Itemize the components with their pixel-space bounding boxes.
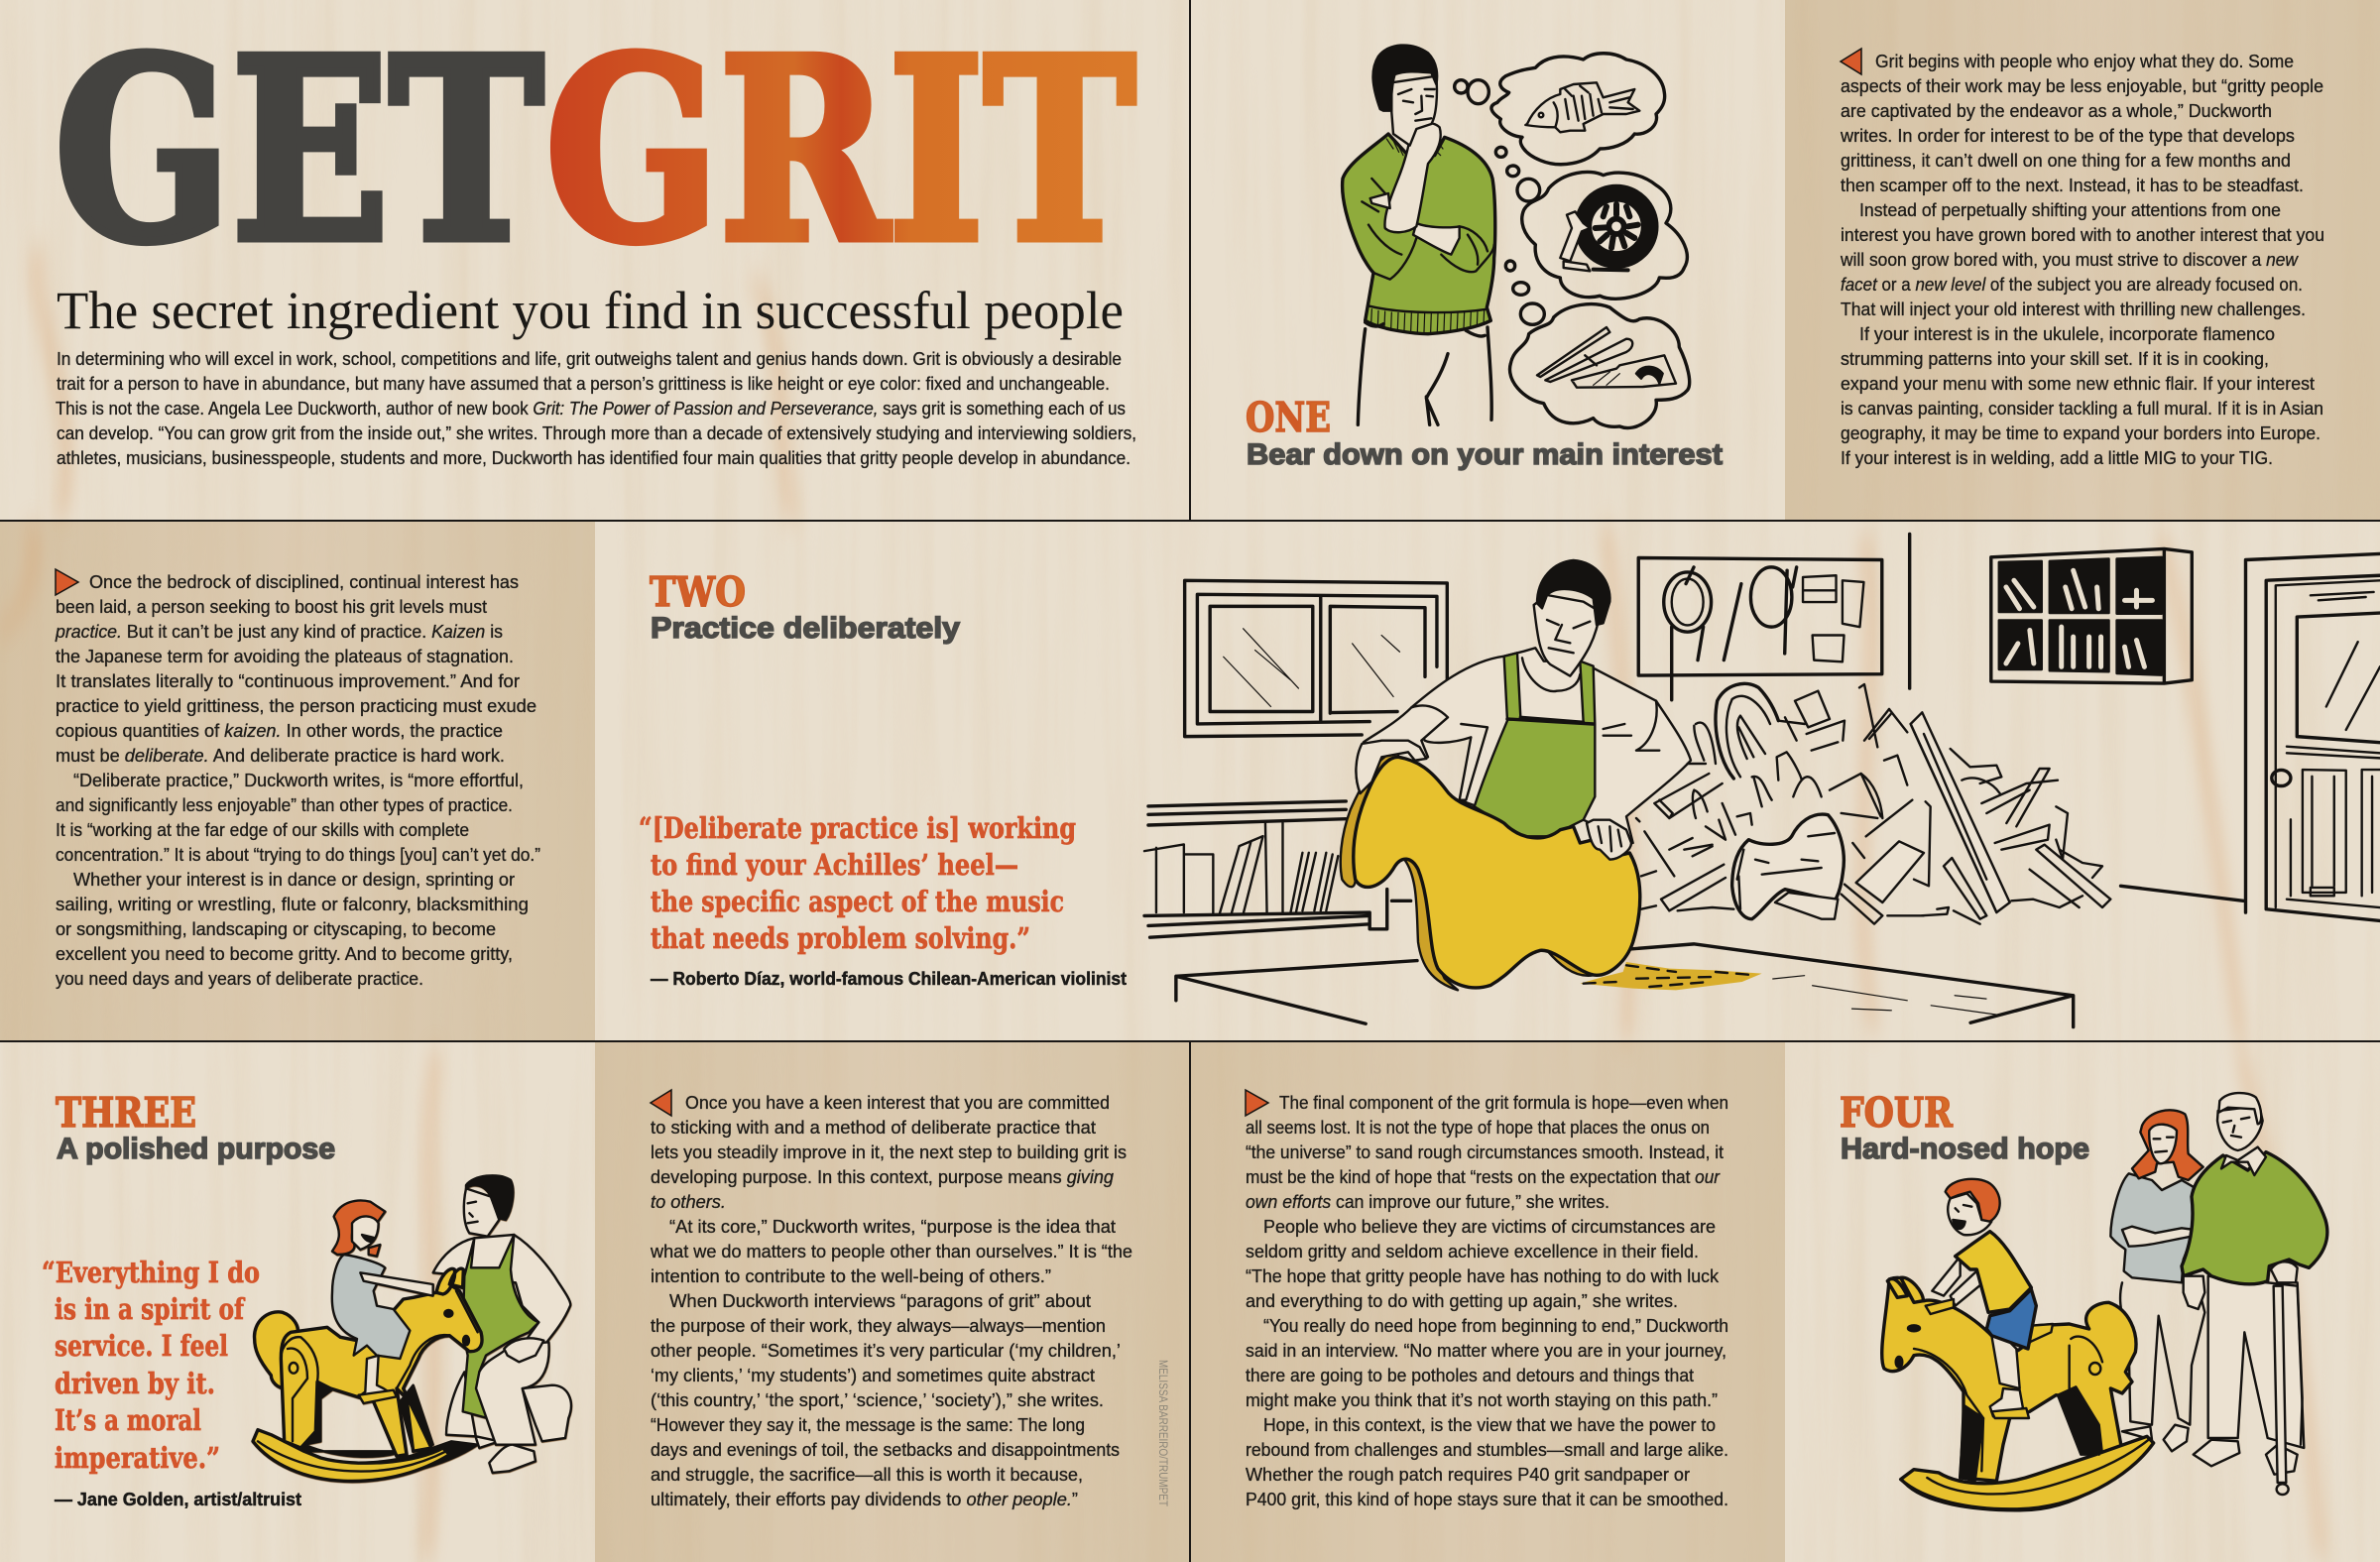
window	[1185, 580, 1447, 737]
heading: THREE	[56, 1089, 335, 1165]
text block: column two: been laid, a person seeking to boost his grit levels must	[56, 596, 487, 617]
text block: column three: developing purpose. In this context, purpose means giving	[651, 1166, 1115, 1187]
bookshelf	[1144, 801, 1411, 937]
pull quote: Roberto Diaz: the specific aspect of the music	[651, 885, 1064, 918]
pull quote: Jane Golden: It’s a moral	[55, 1403, 201, 1437]
text block: column two: you need days and years of deliberate practice.	[56, 968, 423, 989]
heading: ONE	[1246, 394, 1723, 471]
text block: column one: If your interest is in the ukulele, incorporate flamenco	[1859, 323, 2275, 344]
text block: column one: aspects of their work may be less enjoyable, but “gritty people	[1841, 75, 2323, 96]
text block: column three: to sticking with and a method of deliberate practice that	[651, 1117, 1096, 1138]
pull quote: Roberto Diaz: to find your Achilles’ heel—	[651, 848, 1018, 882]
pull quote: Jane Golden: imperative.”	[55, 1441, 220, 1475]
text block: column one: writes. In order for interest to be of the type that develops	[1840, 125, 2295, 146]
pull quote: Roberto Diaz: that needs problem solving.”	[651, 921, 1030, 955]
pull quote: Jane Golden: service. I feel	[55, 1329, 228, 1363]
icon: left marker triangle	[1841, 49, 1861, 74]
rocking horse	[291, 1379, 404, 1457]
text block: column one: will soon grow bored with, you must strive to discover a new	[1840, 249, 2300, 270]
wall cabinet	[1991, 548, 2192, 683]
text block: column three: “At its core,” Duckworth writes, “purpose is the idea that	[669, 1216, 1116, 1237]
door	[2121, 553, 2380, 920]
text block: column two: It translates literally to “continuous improvement.” And for	[56, 670, 520, 691]
text block: column four: Whether the rough patch requires P40 grit sandpaper or	[1246, 1464, 1690, 1485]
text block: column four: P400 grit, this kind of hope stays sure that it can be smoothed.	[1246, 1489, 1728, 1509]
boy	[1932, 1257, 1961, 1296]
heading: FOUR	[1840, 1089, 2089, 1165]
credit: photographer: MELISSA BARREIRO/TRUMPET	[1156, 1360, 1170, 1507]
text block: column two	[55, 569, 540, 989]
icon: left marker triangle	[651, 1090, 671, 1116]
text block: column one: is canvas painting, consider tackling a full mural. If it is in Asian	[1841, 398, 2323, 419]
text block: column two: “Deliberate practice,” Duckworth writes, is “more effortful,	[73, 770, 524, 790]
text block: column one: Grit begins with people who enjoy what they do. Some	[1875, 51, 2294, 71]
illustration: workshop background	[1144, 534, 2380, 1027]
icon: right marker triangle	[56, 569, 78, 595]
text block: column three: the purpose of their work, they always—always—mention	[651, 1315, 1106, 1336]
text block: column three: days and evenings of toil, the setbacks and disappointments	[651, 1439, 1120, 1460]
text block: column four: “the universe” to sand rough circumstances smooth. Instead, it	[1246, 1141, 1724, 1162]
text block: column two: concentration.” It is about “trying to do things [you] can’t yet do.”	[56, 844, 540, 865]
text block: column four: there are going to be potholes and detours and things that	[1246, 1365, 1694, 1385]
text block: column four: must be the kind of hope that “rests on the expectation that our	[1246, 1166, 1721, 1187]
pegboard with tools	[1638, 557, 1882, 700]
text block: column two: the Japanese term for avoiding the plateaus of stagnation.	[56, 646, 514, 666]
text block: column three: other people. “Sometimes it’s very particular (‘my children,’	[651, 1340, 1121, 1361]
illustration: boy on rocking horse with grandparents	[1882, 1093, 2327, 1510]
text block: introduction: athletes, musicians, businesspeople, students and more, Duckworth has identified four main qualities that gritty people develop in abundance.	[57, 447, 1130, 468]
title: GET GRIT: GRIT	[545, 4, 1135, 298]
pull quote: Roberto Diaz: — Roberto Díaz, world-famous Chilean-American violinist	[651, 969, 1127, 989]
text block: column three: (‘this country,’ ‘the sport,’ ‘science,’ ‘society’),” she writes.	[651, 1389, 1104, 1410]
text block: column three: Once you have a keen interest that you are committed	[685, 1092, 1110, 1113]
boards	[1911, 712, 2010, 912]
text block: column two: sailing, writing or wrestling, flute or falconry, blacksmithing	[56, 894, 529, 914]
text block: column three	[650, 1090, 1132, 1509]
text block: column four: might make you think that it’s not worth staying on this path.”	[1246, 1389, 1718, 1410]
text block: column three: ultimately, their efforts pay dividends to other people.”	[651, 1489, 1078, 1509]
icon: chisels and saw	[1537, 327, 1676, 388]
text block: column three: what we do matters to people other than ourselves.” It is “the	[650, 1241, 1132, 1262]
text block: column one: That will inject your old interest with thrilling new challenges.	[1841, 299, 2306, 319]
text block: column one: strumming patterns into your skill set. If it is in cooking,	[1841, 348, 2269, 369]
text block: column one: Instead of perpetually shifting your attentions from one	[1859, 199, 2281, 220]
text block: column one: then scamper off to the next. Instead, it has to be steadfast.	[1841, 175, 2304, 195]
text block: column one: facet or a new level of the subject you are already focused on.	[1841, 274, 2303, 295]
text block: column three: to others.	[651, 1191, 726, 1212]
heading: ONE: ONE	[1246, 394, 1331, 441]
text block: column four: all seems lost. It is not the type of hope that places the onus on	[1246, 1117, 1710, 1138]
text block: column four: The final component of the grit formula is hope—even when	[1279, 1092, 1728, 1113]
text block: column two: copious quantities of kaizen. In other words, the practice	[56, 720, 503, 741]
pull quote: Jane Golden: — Jane Golden, artist/altruist	[55, 1490, 301, 1509]
rocking horse	[1904, 1441, 2145, 1510]
text block: column two: practice to yield grittiness, the person practicing must exude	[56, 695, 536, 716]
text block: column three: When Duckworth interviews “paragons of grit” about	[669, 1290, 1091, 1311]
text block: column three: “However they say it, the message is the same: The long	[651, 1414, 1085, 1435]
text block: column three: lets you steadily improve in it, the next step to building grit is	[651, 1141, 1127, 1162]
heading: subtitle: The secret ingredient you find in successful people	[57, 281, 1124, 340]
pull quote: Jane Golden: “Everything I do	[42, 1256, 260, 1289]
workbench	[1176, 944, 2074, 1027]
text block: column two: and significantly less enjoyable” than other types of practice.	[56, 794, 513, 815]
text block: column four: Hope, in this context, is the view that we have the power to	[1263, 1414, 1716, 1435]
icon: fish	[1525, 82, 1639, 132]
text block: column two: must be deliberate. And deliberate practice is hard work.	[56, 745, 505, 766]
heading: FOUR: FOUR	[1840, 1089, 1954, 1137]
pull quote: Jane Golden: is in a spirit of	[55, 1292, 246, 1326]
text block: column one: interest you have grown bored with to another interest that you	[1841, 224, 2324, 245]
heading: THREE: THREE	[56, 1089, 196, 1137]
illustration: carver shaping wood	[1341, 560, 1762, 990]
icon: right marker triangle	[1246, 1090, 1268, 1116]
text block: column four: own efforts can improve our future,” she writes.	[1246, 1191, 1609, 1212]
text block: introduction: can develop. “You can grow grit from the inside out,” she writes. Through more than a decade of extensively studying and interviewing soldiers,	[57, 422, 1136, 443]
text block: introduction: In determining who will excel in work, school, competitions and life, grit outweighs talent and genius hands down. Grit is obviously a desirable	[57, 348, 1122, 369]
pull quote: Jane Golden: driven by it.	[55, 1367, 215, 1400]
title: GET GRIT	[55, 4, 1135, 298]
text block: column three: ‘my clients,’ ‘my students’) and sometimes quite abstract	[651, 1365, 1095, 1385]
text block: column two: It is “working at the far edge of our skills with complete	[56, 819, 469, 840]
heading: TWO: TWO	[650, 568, 746, 616]
text block: column four: People who believe they are victims of circumstances are	[1263, 1216, 1716, 1237]
text block: column two: or songsmithing, landscaping or cityscaping, to become	[56, 918, 496, 939]
illustration: man and girl with rocking horse	[253, 1175, 571, 1481]
girl	[332, 1200, 385, 1257]
text block: column two: excellent you need to become gritty. And to become gritty,	[56, 943, 513, 964]
text block: column four: and everything to do with getting up again,” she writes.	[1246, 1290, 1678, 1311]
text block: introduction	[56, 348, 1136, 468]
title: GET GRIT: GET	[55, 4, 543, 298]
pull quote: Roberto Diaz: “[Deliberate practice is] working	[639, 811, 1076, 845]
text block: column one	[1840, 49, 2324, 468]
text block: column two: Once the bedrock of disciplined, continual interest has	[89, 571, 519, 592]
text block: column one: expand your menu with some new ethnic flair. If your interest	[1841, 373, 2315, 394]
illustration: pile of discarded wood	[1636, 683, 2110, 924]
heading: TWO	[650, 568, 960, 645]
half carved body	[1732, 814, 1844, 919]
text block: column one: are captivated by the endeavor as a whole,” Duckworth	[1841, 100, 2272, 121]
subheading: Hard-nosed hope: Hard-nosed hope	[1841, 1133, 2089, 1165]
wood dust	[1580, 962, 1762, 990]
pull quote: Jane Golden	[42, 1256, 301, 1509]
subheading: Practice deliberately: Practice deliberately	[651, 612, 960, 645]
illustration: thinking man with thought bubbles	[1343, 46, 1690, 428]
text block: column four: “The hope that gritty people have has nothing to do with luck	[1246, 1265, 1720, 1286]
pull quote: Roberto Diaz	[639, 811, 1127, 989]
text block: column one: grittiness, it can’t dwell on one thing for a few months and	[1841, 150, 2291, 171]
subheading: A polished purpose: A polished purpose	[57, 1133, 335, 1165]
text block: column three: and struggle, the sacrifice—all this is worth it because,	[651, 1464, 1083, 1485]
grandfather	[2208, 1276, 2304, 1448]
text block: column one: If your interest is in welding, add a little MIG to your TIG.	[1841, 447, 2273, 468]
text block: column four: “You really do need hope from beginning to end,” Duckworth	[1263, 1315, 1728, 1336]
text block: column two: Whether your interest is in dance or design, sprinting or	[73, 869, 515, 890]
subheading: Bear down on your main interest: Bear down on your main interest	[1247, 438, 1723, 471]
text block: column four: seldom gritty and seldom achieve excellence in their field.	[1246, 1241, 1699, 1262]
text block: column four: said in an interview. “No matter where you are in your journey,	[1246, 1340, 1726, 1361]
text block: column one: geography, it may be time to expand your borders into Europe.	[1841, 422, 2320, 443]
text block: introduction: trait for a person to have in abundance, but many have assumed that a person’s grittiness is like height or eye color: fixed and unchangeable.	[57, 373, 1110, 394]
icon: tire and wrench	[1560, 185, 1657, 271]
text block: column three: intention to contribute to the well-being of others.”	[651, 1265, 1051, 1286]
woman	[2120, 1282, 2204, 1425]
text block: column two: practice. But it can’t be just any kind of practice. Kaizen is	[55, 621, 503, 642]
text block: introduction: This is not the case. Angela Lee Duckworth, author of new book Grit: The Power of Passion and Perseverance, says grit is something each of us	[56, 398, 1126, 419]
text block: column four: rebound from challenges and stumbles—small and large alike.	[1246, 1439, 1728, 1460]
text block: column four	[1246, 1090, 1728, 1509]
